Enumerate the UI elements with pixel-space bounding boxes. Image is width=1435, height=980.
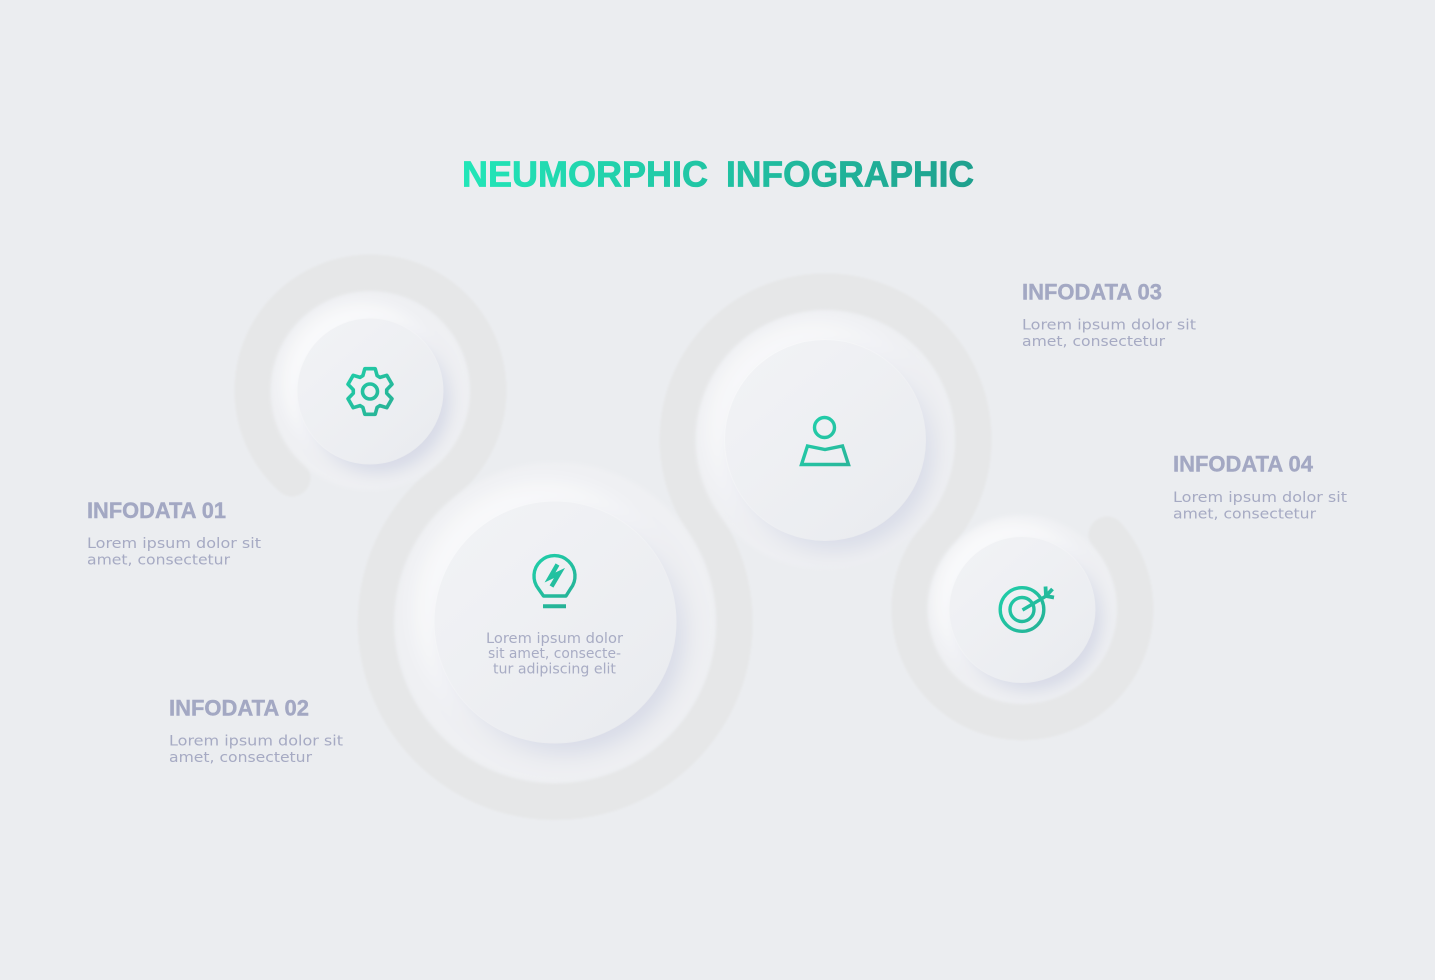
- title: [462, 154, 974, 194]
- text block: infodata 01: INFODATA 01: [87, 498, 226, 523]
- text block: infodata 03: [1022, 280, 1196, 350]
- text block: infodata 04: amet, consectetur: [1173, 506, 1316, 522]
- panel: step 1: [88, 304, 450, 566]
- title: NEUMORPHIC: [462, 154, 708, 194]
- text block: infodata 04: Lorem ipsum dolor sit: [1173, 489, 1347, 506]
- infographic canvas: [88, 160, 1347, 787]
- panel: step 2: [170, 482, 683, 764]
- disc 2: [434, 501, 676, 743]
- text block: infodata 03: Lorem ipsum dolor sit: [1022, 316, 1196, 334]
- text block: infodata 03: INFODATA 03: [1022, 280, 1162, 304]
- text block: infodata 04: INFODATA 04: [1173, 452, 1313, 476]
- text block: infodata 01: Lorem ipsum dolor sit: [87, 535, 261, 552]
- panel: step 3: [708, 284, 1196, 549]
- recessed well 3: [708, 324, 932, 549]
- text block: infodata 01: [87, 498, 261, 568]
- disc text: [486, 631, 623, 678]
- winding ribbon track: [253, 273, 1135, 801]
- panel: step 4: [928, 452, 1347, 703]
- recessed well 2: [415, 482, 683, 752]
- text block: infodata 03: amet, consectetur: [1022, 333, 1165, 350]
- recessed well 1: [282, 304, 450, 472]
- disc 3: [724, 340, 926, 540]
- disc 1: [297, 318, 443, 464]
- icon: person on map: [802, 418, 848, 464]
- disc text: Lorem ipsum dolor: [486, 631, 623, 647]
- disc 4: [949, 536, 1095, 682]
- text block: infodata 02: [169, 696, 343, 766]
- disc text: sit amet, consecte-: [488, 646, 621, 662]
- text block: infodata 02: INFODATA 02: [169, 696, 309, 720]
- disc text: tur adipiscing elit: [493, 662, 617, 678]
- text block: infodata 02: Lorem ipsum dolor sit: [169, 732, 343, 750]
- text block: infodata 04: [1173, 452, 1347, 522]
- text block: infodata 01: amet, consectetur: [87, 552, 230, 568]
- text block: infodata 02: amet, consectetur: [169, 749, 312, 766]
- icon: light bulb: [534, 556, 575, 606]
- icon: gear: [348, 369, 392, 414]
- icon: target with arrow: [1000, 586, 1054, 631]
- title: INFOGRAPHIC: [726, 154, 974, 194]
- recessed well 4: [934, 522, 1102, 690]
